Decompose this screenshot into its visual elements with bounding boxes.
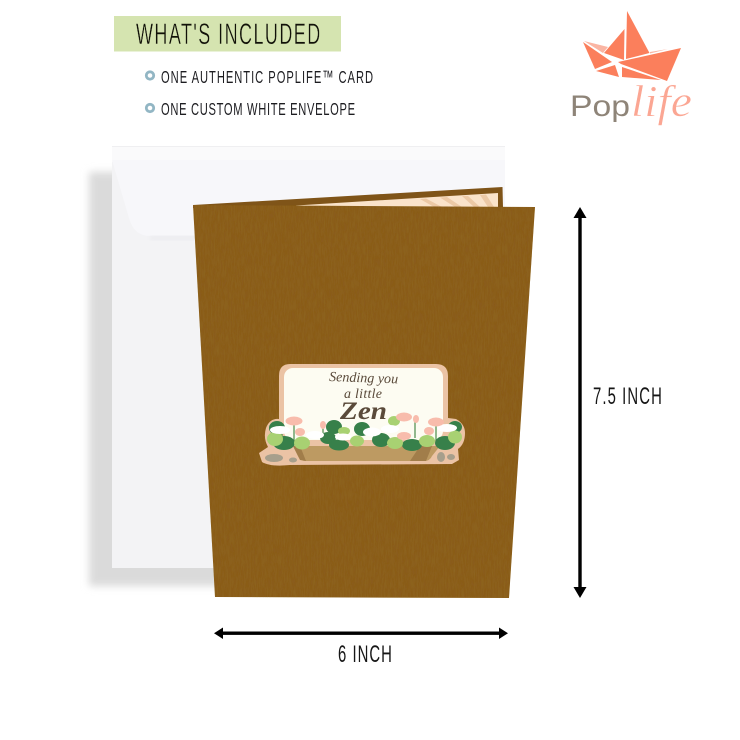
sticker text: Sending you (329, 370, 398, 387)
wordmark: Pop: Pop (570, 90, 630, 123)
icon: origami boat (583, 11, 681, 81)
white lotus flowers (270, 424, 457, 440)
label: 7.5 inch: 7.5 INCH (593, 384, 662, 410)
sticker card (284, 368, 443, 440)
card back panel (193, 187, 503, 208)
arrow: card width (214, 628, 508, 639)
arrow: card height (574, 207, 586, 598)
planter box (293, 446, 440, 461)
envelope body (112, 146, 505, 568)
sticker outline (259, 364, 465, 466)
rocks (265, 452, 455, 462)
sticker text: Zen (339, 398, 387, 425)
card inner page (296, 193, 498, 207)
card front (193, 205, 535, 598)
envelope flap (112, 160, 505, 236)
sticker text (329, 370, 398, 425)
heading: what's included: WHAT'S INCLUDED (136, 19, 320, 51)
panel: what's included (114, 16, 373, 120)
envelope (89, 146, 505, 586)
logo: Poplife (570, 11, 692, 126)
sticker: sending you a little zen (259, 364, 465, 466)
lily pads (269, 420, 462, 451)
flower stems (282, 422, 436, 442)
sticker text: a little (344, 387, 382, 402)
wordmark: life: life (631, 77, 692, 126)
list item: envelope: ONE CUSTOM WHITE ENVELOPE (161, 99, 355, 120)
list item: card: ONE AUTHENTIC POPLIFE™ CARD (161, 67, 373, 88)
envelope shadow (89, 172, 229, 586)
greeting card (193, 187, 535, 598)
pink lotus flowers (286, 412, 444, 440)
label: 6 inch: 6 INCH (338, 642, 392, 668)
